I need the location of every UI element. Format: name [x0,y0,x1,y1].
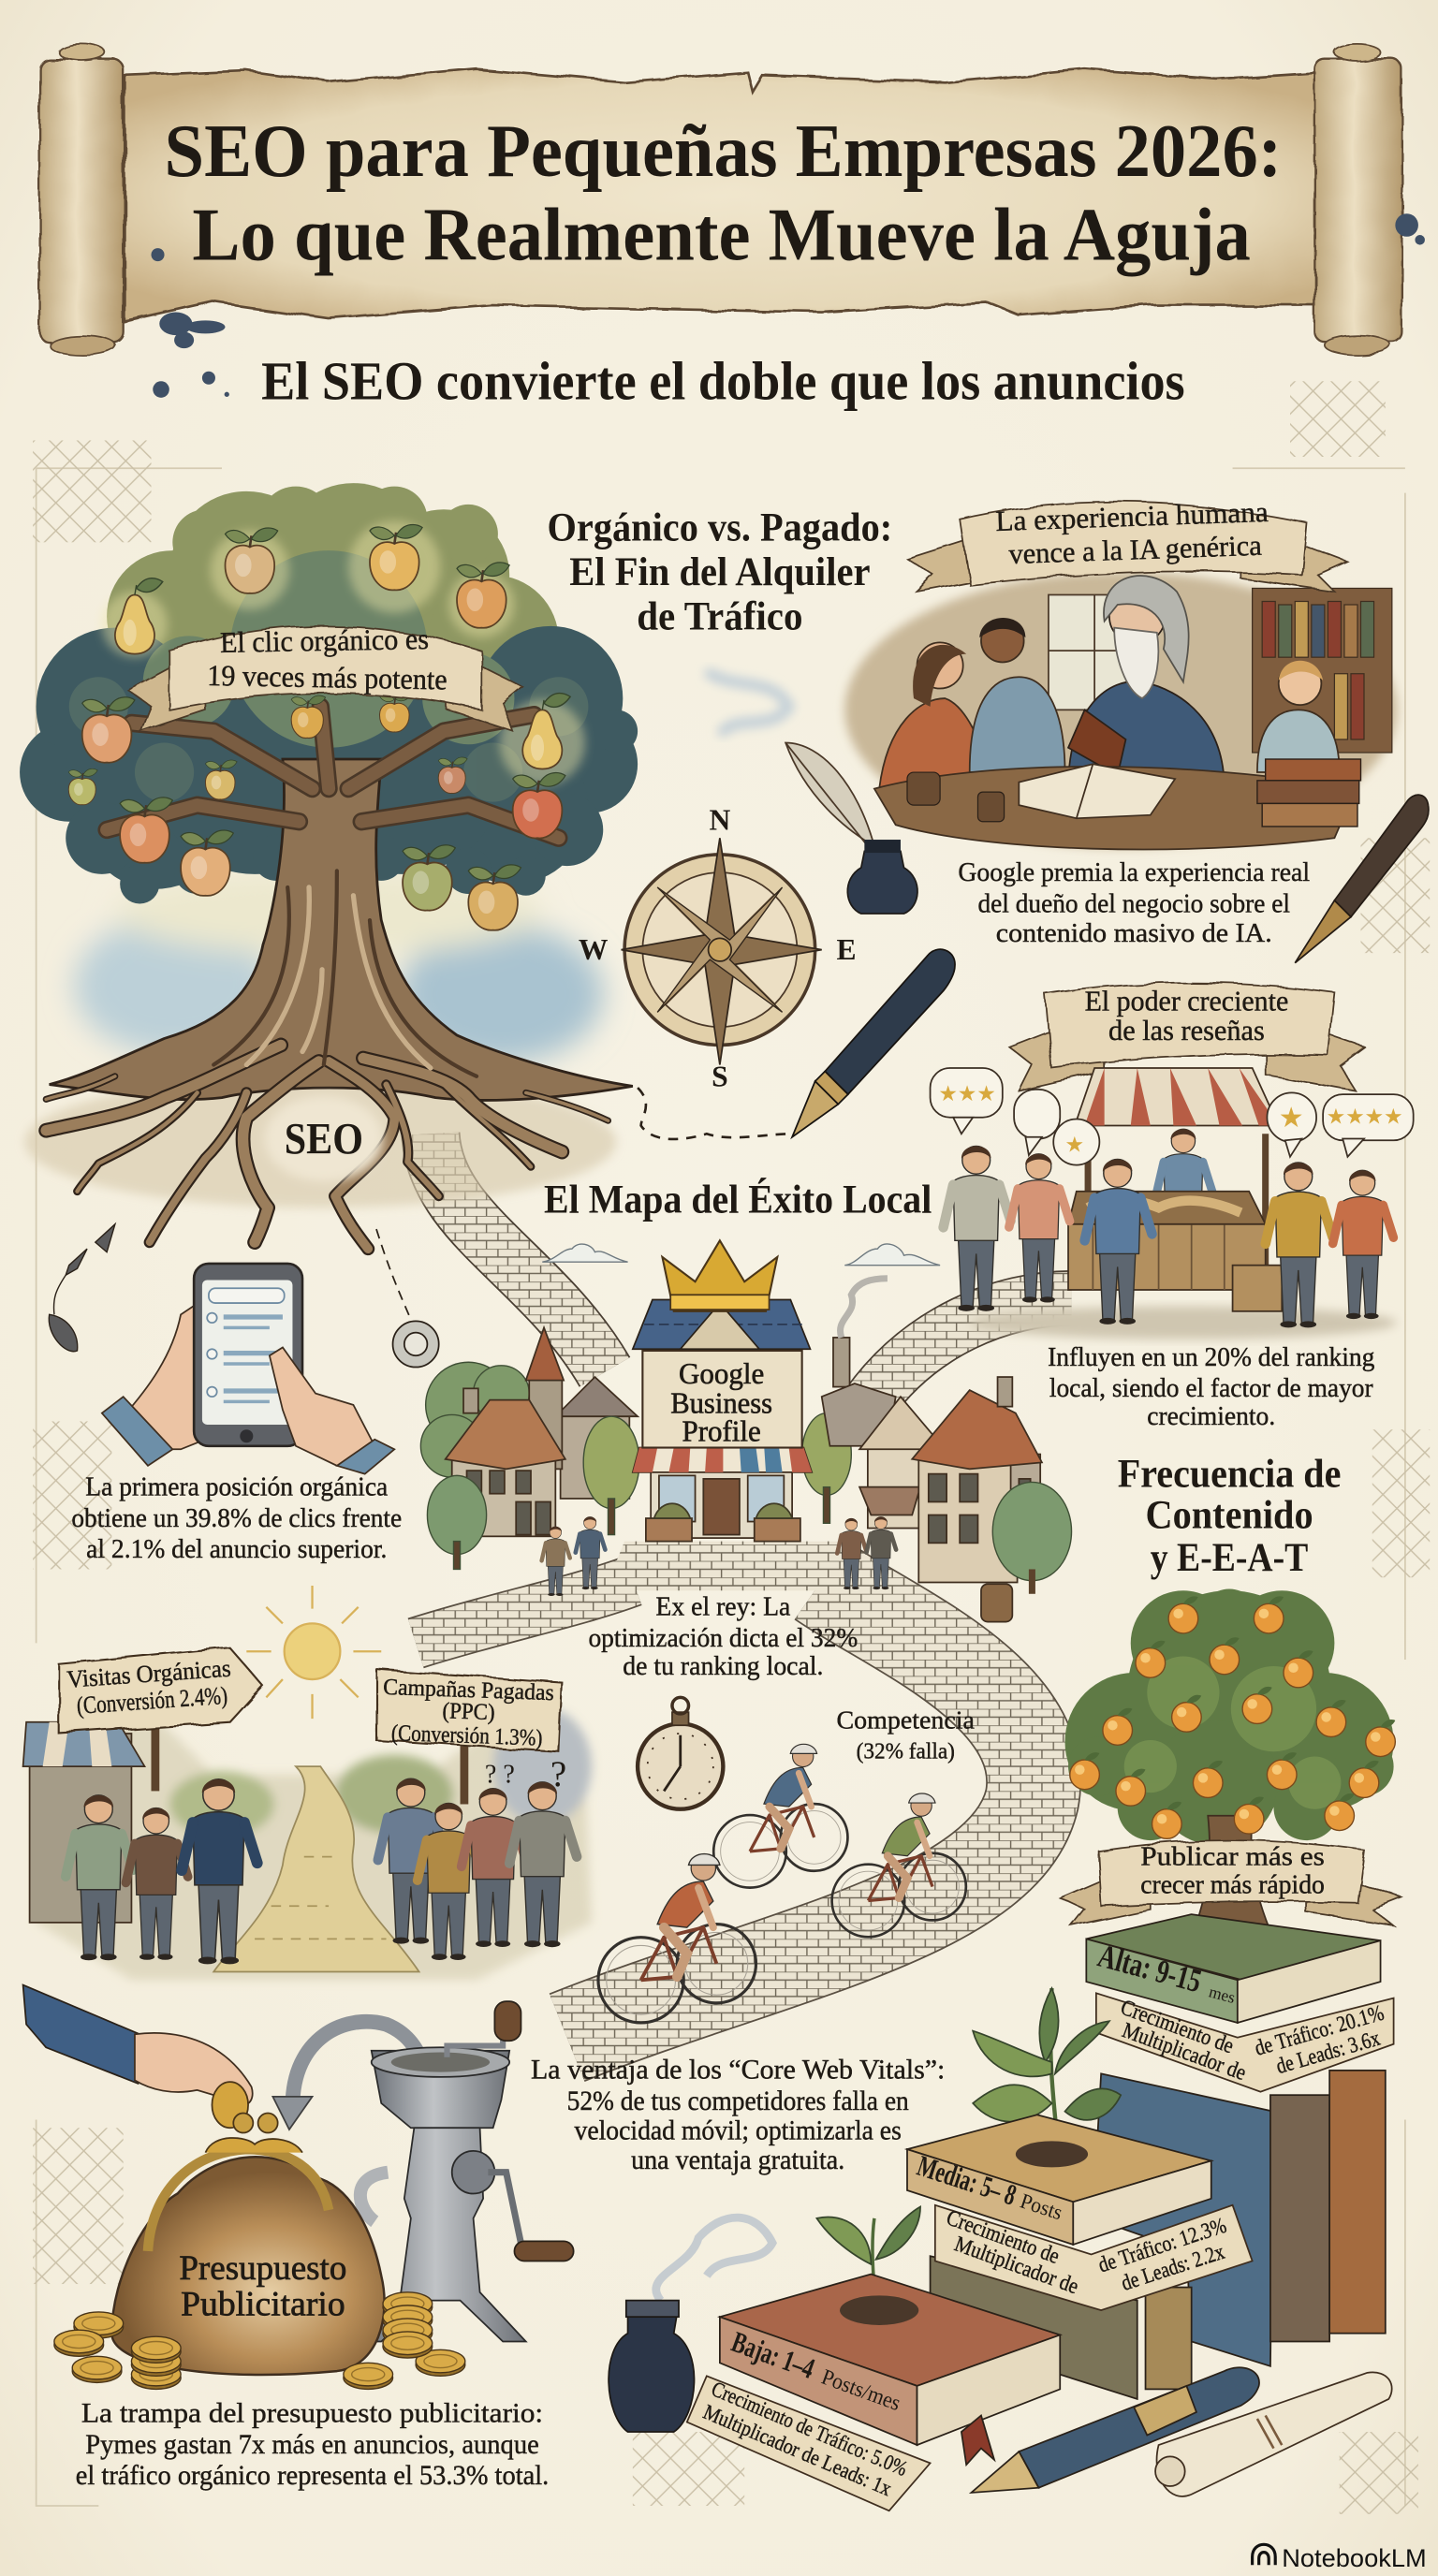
sign: organic: (Conversión 2.4%) [76,1682,228,1720]
illustration: cyclists [598,1744,966,2023]
watermark: NotebookLM: NotebookLM [1282,2543,1427,2572]
book: high frequency [1086,1914,1381,2023]
illustration: signposts and crowds [23,1586,592,1980]
plant: low [816,2207,920,2301]
sign: paid: (Conversión 1.3%) [391,1720,543,1751]
sun [246,1586,381,1719]
illustration: hand dropping coin [23,1985,253,2128]
caption: core web vitals: una ventaja gratuita. [631,2144,844,2175]
roots: dark outline [46,1045,609,1249]
people left [66,1795,133,1960]
heading: organic vs paid [548,505,892,638]
sign: organic [59,1648,263,1734]
sign: organic: Visitas Orgánicas [66,1655,232,1693]
title [165,110,1282,276]
heading: local map: El Mapa del Éxito Local [544,1178,932,1222]
icon: coil and dashed line [376,1229,439,1368]
book: low frequency: Posts/mes [818,2365,903,2416]
compass: S [712,1060,728,1092]
stall [1085,1134,1092,1281]
banner: human experience: vence a la IA genérica [1008,530,1263,570]
coins [54,2292,465,2389]
sign poles [151,1717,159,1791]
ink splatters [151,213,1425,398]
question marks [485,1755,566,1794]
banner: human experience [907,496,1347,592]
caption: GBP king [588,1592,858,1681]
caption: first position: La primera posición orgánica [85,1471,388,1501]
illustration: market stall with reviews: ★ [1065,1134,1084,1157]
barrel [981,1584,1012,1622]
caption: core web vitals: velocidad móvil; optimizarla es [575,2115,902,2146]
question marks: ? [550,1755,566,1794]
caption: ad budget trap: Pymes gastan 7x más en anuncios, aunque [85,2429,539,2460]
caption: core web vitals: La ventaja de los “Core Web Vitals”: [531,2055,945,2086]
plaza cobbles [605,1542,858,1590]
bookshelves [1253,588,1392,753]
tag: medium frequency: de Leads: 2.2x [1119,2240,1227,2296]
awning [633,1448,812,1472]
tag: medium frequency: de Tráfico: 12.3% [1095,2214,1229,2277]
illustration: market stall with reviews: ★★★★ [1327,1105,1402,1129]
banner: reviews: El poder creciente [1085,986,1288,1017]
tag: high frequency: Crecimiento de [1117,1996,1237,2058]
caption: GBP king: optimización dicta el 32% [588,1623,858,1653]
illustration: orange tree [1065,1589,1395,1939]
banner: reviews [1009,983,1364,1091]
tag: low frequency: Multiplicador de Leads: 1x [700,2400,896,2500]
book: low frequency [720,2275,1060,2465]
caption: reviews influence: crecimiento. [1147,1401,1275,1431]
book: medium frequency [907,2115,1211,2245]
caption: reviews influence: local, siendo el factor de mayor [1049,1373,1373,1403]
compass: N [709,803,730,836]
heading: organic vs paid: El Fin del Alquiler [569,549,870,594]
title: SEO para Pequeñas Empresas 2026: [165,110,1282,193]
caption: reviews influence [1048,1342,1374,1431]
customers [944,1146,1011,1311]
heading: content frequency: Frecuencia de [1118,1452,1341,1497]
label: competition [837,1706,975,1764]
caption: ad budget trap: La trampa del presupuesto publicitario: [81,2398,543,2429]
icon: large fountain pen [792,949,955,1137]
mentor [1068,576,1225,789]
caption: ad budget trap [76,2398,549,2491]
icon: stopwatch [638,1697,723,1809]
trees behind [420,1362,529,1477]
Google Business Profile building: Business [670,1387,772,1420]
sign: paid: (PPC) [442,1698,495,1725]
caption: core web vitals: 52% de tus competidores falla en [567,2086,909,2116]
caption: Google reward: del dueño del negocio sobre el [977,888,1290,918]
book: high frequency: mes [1207,1982,1238,2007]
illustration: phone in hands [102,1264,394,1474]
label: budget: Presupuesto [179,2248,346,2287]
icon: rolled scroll [1155,2372,1392,2496]
illustration: budget purse [54,2113,465,2389]
compass [579,803,857,1092]
banner: organic click: El clic orgánico es [220,622,429,659]
book: low frequency: Baja: 1–4 [727,2325,819,2385]
caption: Google reward: contenido masivo de IA. [996,918,1272,948]
caption: first position: obtiene un 39.8% de clics frente [71,1503,402,1533]
banner: publish more: Publicar más es [1140,1842,1325,1871]
sign: paid: Campañas Pagadas [383,1675,554,1705]
caption: ad budget trap: el tráfico orgánico representa el 53.3% total. [76,2460,549,2491]
icon: top fountain pen [1295,795,1429,963]
trunk [50,759,633,1100]
sign [642,1351,802,1448]
caption: reviews influence: Influyen en un 20% del ranking [1048,1342,1374,1372]
book: medium frequency: Posts [1018,2189,1065,2224]
compass: E [837,933,857,966]
illustration: mentor and students [844,572,1397,850]
ground [24,1076,616,1208]
illustration: village [420,1279,1072,1622]
illustration: market stall with reviews [931,1068,1414,1339]
tag: high frequency [1096,1993,1394,2092]
icon: small clouds [542,1244,940,1266]
illustration: market stall with reviews: ★★★ [938,1082,996,1105]
icon: quill and ink bottle [785,742,917,914]
illustration: grinder [272,2001,574,2341]
trees front left [427,1413,851,1569]
compass: W [579,933,609,966]
banner: organic click [128,622,522,731]
heading: content frequency [1118,1452,1341,1580]
boy right [1257,661,1340,772]
store [651,1469,792,1538]
icon: bottom pen [971,2367,1259,2493]
banner: organic click: 19 veces más potente [207,659,448,695]
tag: medium frequency [935,2205,1253,2310]
question marks: ? ? [485,1761,515,1790]
tag: high frequency: de Leads: 3.6x [1273,2027,1383,2079]
caption: first position: al 2.1% del anuncio superior. [86,1534,387,1564]
caption: Google reward [958,857,1310,948]
sign: paid [376,1670,562,1751]
label: competition: Competencia [837,1706,975,1734]
SEO root label [265,1096,383,1181]
tree illustration: SEO roots [20,483,638,1249]
subtitle: El SEO convierte el doble que los anuncios [261,351,1185,412]
label: budget [179,2248,346,2322]
tag: low frequency: Crecimiento de Tráfico: 5.0% [708,2377,911,2481]
caption: first position [71,1471,402,1564]
tag: medium frequency: Crecimiento de [943,2205,1063,2269]
banner: publish more [1060,1840,1401,1925]
tag: medium frequency: Multiplicador de [951,2232,1081,2299]
caption: GBP king: Ex el rey: La [655,1592,790,1622]
banner: reviews: de las reseñas [1108,1015,1265,1046]
right houses [822,1338,1042,1582]
SEO root label: SEO [285,1115,363,1164]
banner: human experience: La experiencia humana [995,496,1269,537]
cobblestone roads [416,1134,1072,2038]
woman [879,642,994,789]
dashed map trail [638,1088,792,1139]
roof [633,1300,810,1349]
people [542,1527,570,1596]
icon: smoke [710,674,789,731]
heading: organic vs paid: Orgánico vs. Pagado: [548,505,892,550]
people right [378,1778,446,1944]
window [1049,594,1140,710]
label: budget: Publicitario [181,2284,345,2322]
Google Business Profile building: Google [679,1357,764,1390]
heading: content frequency: Contenido [1146,1493,1313,1538]
boy [970,618,1065,772]
tag: high frequency: de Tráfico: 20.1% [1252,2001,1387,2061]
book stack [687,1914,1394,2510]
left houses [446,1327,638,1536]
Google Business Profile building: Profile [682,1415,761,1448]
book: medium frequency: Media: 5– 8 [914,2149,1020,2212]
icon: ink bottle with smoke [609,2217,772,2432]
title: Lo que Realmente Mueve la Aguja [192,193,1251,276]
label: competition: (32% falla) [857,1738,955,1764]
caption: core web vitals [531,2055,945,2175]
storefront [30,1734,131,1923]
book: high frequency: Alta: 9-15 [1094,1938,1205,1999]
speech bubbles [931,1068,1414,1165]
sky wash [74,870,603,1063]
standing books [931,2071,1386,2399]
header scroll with title [39,44,1401,355]
caption: Google reward: Google premia la experiencia real [958,857,1310,887]
heading: organic vs paid: de Tráfico [637,593,803,638]
banner: publish more: crecer más rápido [1140,1870,1325,1899]
plant: medium [973,1988,1121,2149]
crown [662,1240,777,1311]
Google Business Profile building [633,1240,812,1542]
icon: feather arrow [49,1224,115,1352]
tag: high frequency: Multiplicador de [1119,2018,1249,2086]
caption: GBP king: de tu ranking local. [623,1651,823,1681]
path [213,1766,419,1972]
illustration: market stall with reviews: ★ [1279,1103,1303,1134]
heading: content frequency: y E-E-A-T [1151,1535,1308,1580]
apples [68,525,570,930]
table and open book [874,767,1356,850]
tree right [992,1482,1072,1581]
crown [20,483,638,903]
